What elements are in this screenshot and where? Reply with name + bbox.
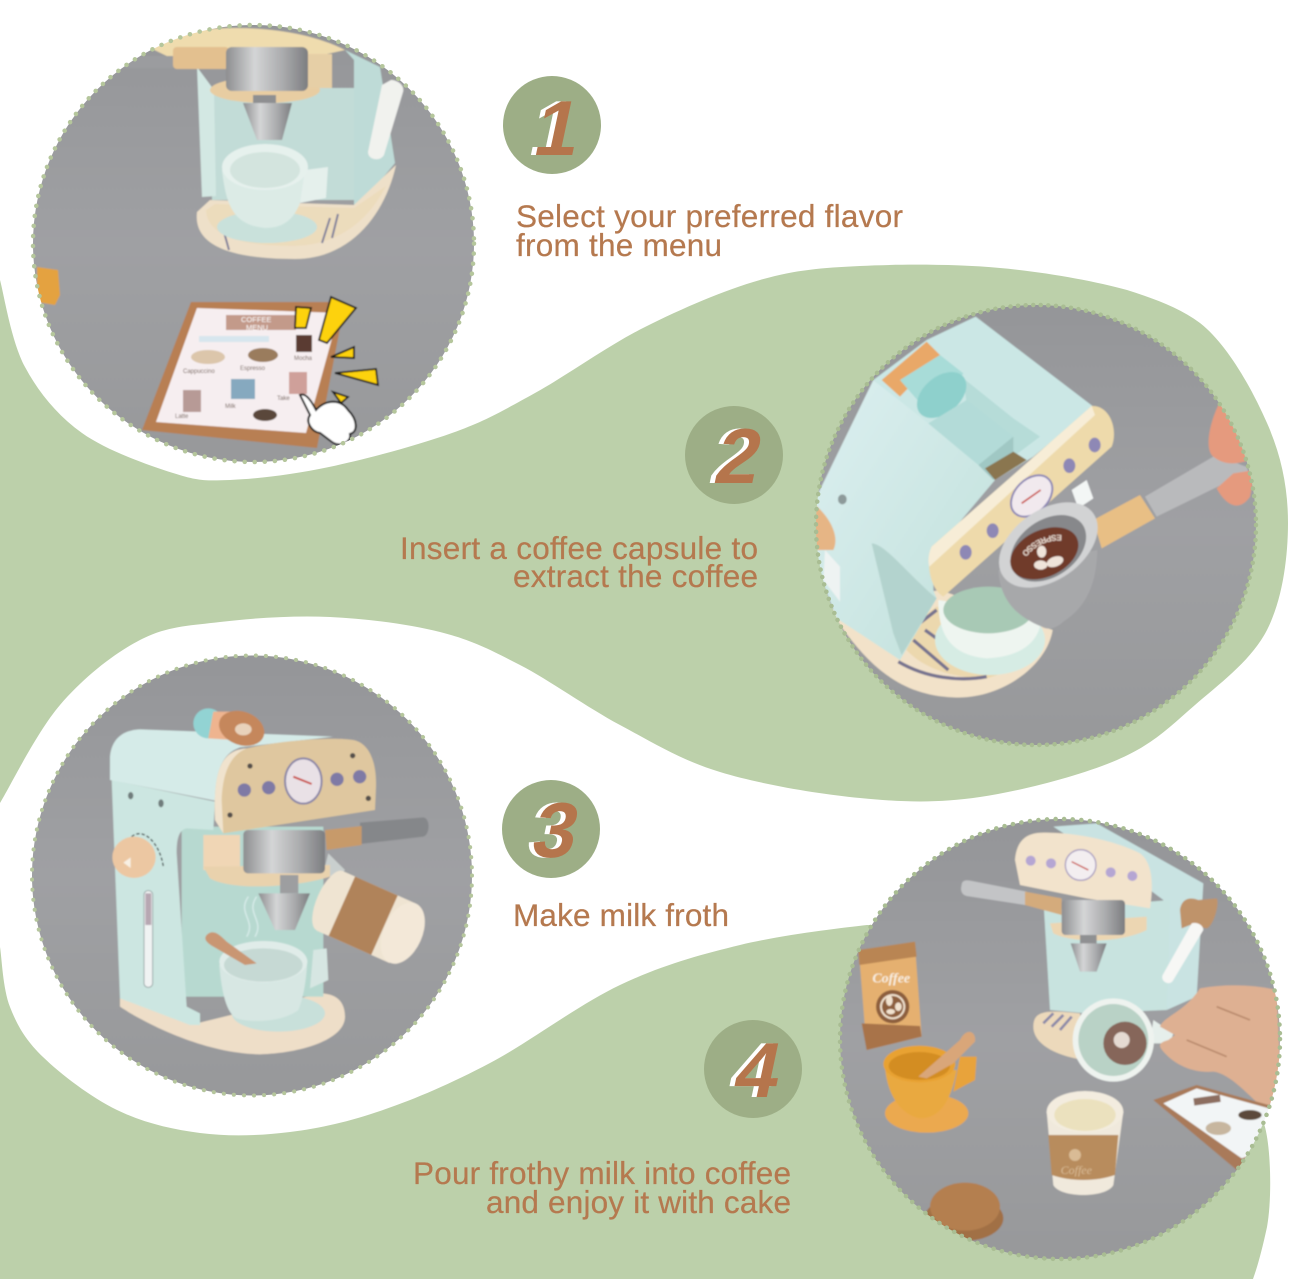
illustration: coffee machine in background (961, 823, 1218, 1060)
panel: step 1 photo (30, 20, 480, 470)
badge: number 2: 2 (703, 413, 765, 500)
text: step 2 caption: extract the coffee (513, 558, 758, 594)
text: step 1 caption (516, 198, 903, 263)
badge: number 3 (502, 780, 600, 878)
illustration: coffee menu card (142, 302, 345, 448)
decorative dotted ring (816, 305, 1256, 745)
illustration: machine base and cup (830, 587, 1053, 697)
decorative dotted ring (32, 656, 472, 1096)
text: step 4 caption: and enjoy it with cake (486, 1184, 791, 1220)
text: step 2 caption (400, 530, 758, 594)
text: step 1 caption: Select your preferred flavor (516, 198, 903, 234)
illustration: wooden control panel (215, 739, 376, 833)
panel: step 4 photo (835, 815, 1287, 1265)
badge: number 3: 3 (520, 787, 582, 874)
background: lower green wave (0, 925, 1270, 1279)
illustration: brown lid (925, 1183, 1003, 1241)
illustration: machine body (110, 729, 333, 1025)
decorative dotted ring (33, 25, 474, 462)
background: upper green wave (0, 265, 1288, 803)
illustration: thermometer (144, 891, 153, 987)
badge: number 1: 1 (522, 85, 584, 172)
text: step 3 caption: Make milk froth (513, 897, 729, 933)
badge: number 1 (503, 76, 601, 174)
illustration: machine base (120, 993, 345, 1054)
panel: step 2 photo (816, 305, 1256, 745)
illustration: steam lines (245, 897, 258, 937)
illustration: mint machine body (813, 317, 1093, 660)
illustration: coffee menu card: MENU (246, 323, 268, 332)
illustration: takeaway milk cup (312, 854, 426, 965)
badge: number 2: 2 (708, 413, 770, 500)
illustration: hand and white cup with capsule (1073, 985, 1282, 1112)
illustration: coffee menu card: Espresso (240, 366, 266, 372)
illustration: yellow cup with saucer and spoon (883, 1032, 977, 1133)
illustration: portafilter with espresso capsule: ESPRESSO (1022, 534, 1062, 557)
illustration: coffee bag (858, 942, 922, 1050)
badge: number 4: 4 (722, 1027, 784, 1114)
text: step 1 caption: from the menu (516, 227, 722, 263)
illustration: coffee menu card: Take (277, 396, 290, 402)
badge: number 3: 3 (525, 787, 587, 874)
icon: orange cup fragment (37, 267, 60, 305)
badge: number 2 (685, 406, 783, 504)
text: step 2 caption: Insert a coffee capsule to (400, 530, 758, 566)
badge: number 1: 1 (527, 85, 589, 172)
text: step 4 caption: Pour frothy milk into coffee (413, 1155, 791, 1191)
illustration: coffee menu card: Latte (175, 414, 189, 420)
illustration: coffee menu card: Mocha (294, 356, 313, 362)
illustration: coffee bag: Coffee (872, 972, 910, 987)
illustration: cup with spoon (205, 932, 328, 1032)
icon: white pointing hand (300, 394, 356, 444)
illustration: coffee menu card: Milk (225, 404, 237, 410)
illustration: takeaway coffee cup: Coffee (1061, 1163, 1093, 1177)
icon: yellow burst marks (295, 297, 378, 403)
illustration: coffee menu card: COFFEE (241, 315, 271, 324)
decorative dotted ring (840, 819, 1280, 1259)
illustration: menu card corner (1153, 1084, 1268, 1170)
illustration: portafilter with espresso capsule (998, 456, 1248, 629)
illustration: wooden control panel (928, 406, 1114, 597)
illustration: temperature knob (112, 834, 163, 878)
illustration: takeaway coffee cup (1047, 1091, 1123, 1195)
illustration: coffee menu card: Cappuccino (183, 369, 215, 375)
illustration: capsules on top (192, 708, 265, 747)
panel: step 3 photo (25, 650, 480, 1100)
illustration: group head and wand (203, 817, 429, 930)
text: step 4 caption (413, 1155, 791, 1220)
badge: number 4 (704, 1020, 802, 1118)
badge: number 4: 4 (727, 1027, 789, 1114)
illustration: coffee machine top view (154, 27, 404, 260)
illustration: hand holding handle (1208, 405, 1252, 506)
